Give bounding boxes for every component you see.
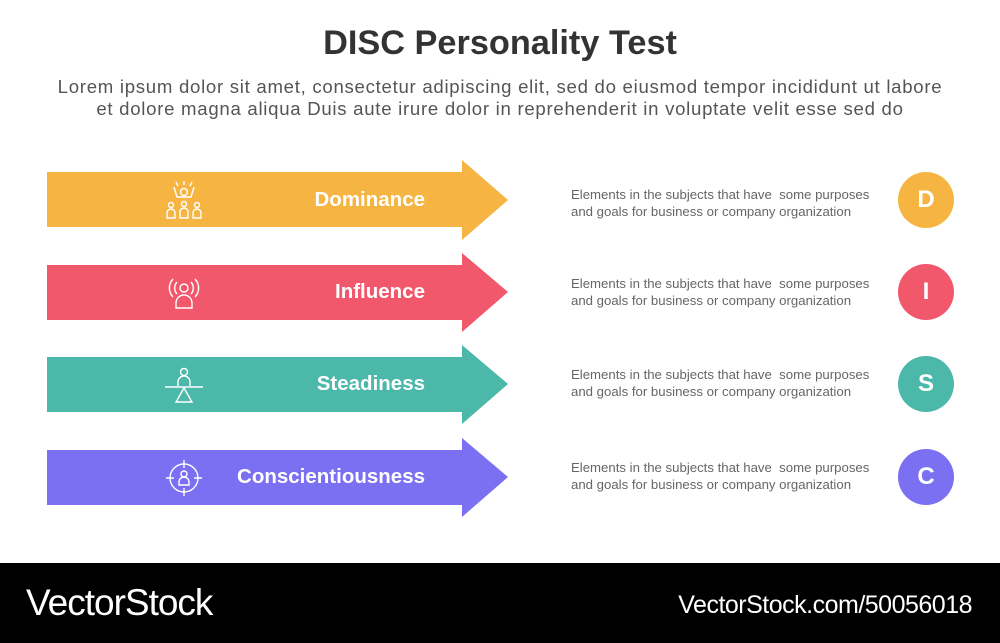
arrow: steadiness	[47, 345, 508, 424]
subtitle: et dolore magna aliqua Duis aute irure dolor in reprehenderit in voluptate velit esse sed do	[96, 98, 904, 119]
title: DISC Personality Test	[323, 24, 677, 62]
description I: Elements in the subjects that have some purposes	[571, 276, 869, 291]
subtitle: Lorem ipsum dolor sit amet, consectetur adipiscing elit, sed do eiusmod tempor incididunt ut labore	[58, 76, 942, 97]
circle S	[898, 356, 954, 412]
description D	[571, 187, 869, 219]
circle I: I	[923, 278, 929, 305]
circle I	[898, 264, 954, 320]
description S	[571, 367, 869, 399]
footer bar	[0, 563, 1000, 643]
circle S: S	[918, 370, 934, 397]
circle D	[898, 172, 954, 228]
description I	[571, 276, 869, 308]
description C: and goals for business or company organization	[571, 477, 851, 492]
label: Dominance: Dominance	[314, 188, 425, 211]
arrow: influence	[47, 253, 508, 332]
arrow: dominance	[47, 160, 508, 240]
label: Steadiness: Steadiness	[317, 372, 425, 395]
footer logo: VectorStock	[26, 582, 212, 623]
description D: and goals for business or company organization	[571, 204, 851, 219]
description D: Elements in the subjects that have some purposes	[571, 187, 869, 202]
description I: and goals for business or company organization	[571, 293, 851, 308]
description S: and goals for business or company organization	[571, 384, 851, 399]
subtitle	[58, 76, 942, 119]
circle D: D	[917, 186, 935, 213]
description C: Elements in the subjects that have some purposes	[571, 460, 869, 475]
description S: Elements in the subjects that have some purposes	[571, 367, 869, 382]
label: Conscientiousness: Conscientiousness	[237, 465, 425, 488]
description C	[571, 460, 869, 492]
circle C: C	[917, 463, 935, 490]
circle C	[898, 449, 954, 505]
arrow: conscientiousness	[47, 438, 508, 517]
footer url: VectorStock.com/50056018	[678, 591, 972, 619]
label: Influence: Influence	[335, 280, 425, 303]
